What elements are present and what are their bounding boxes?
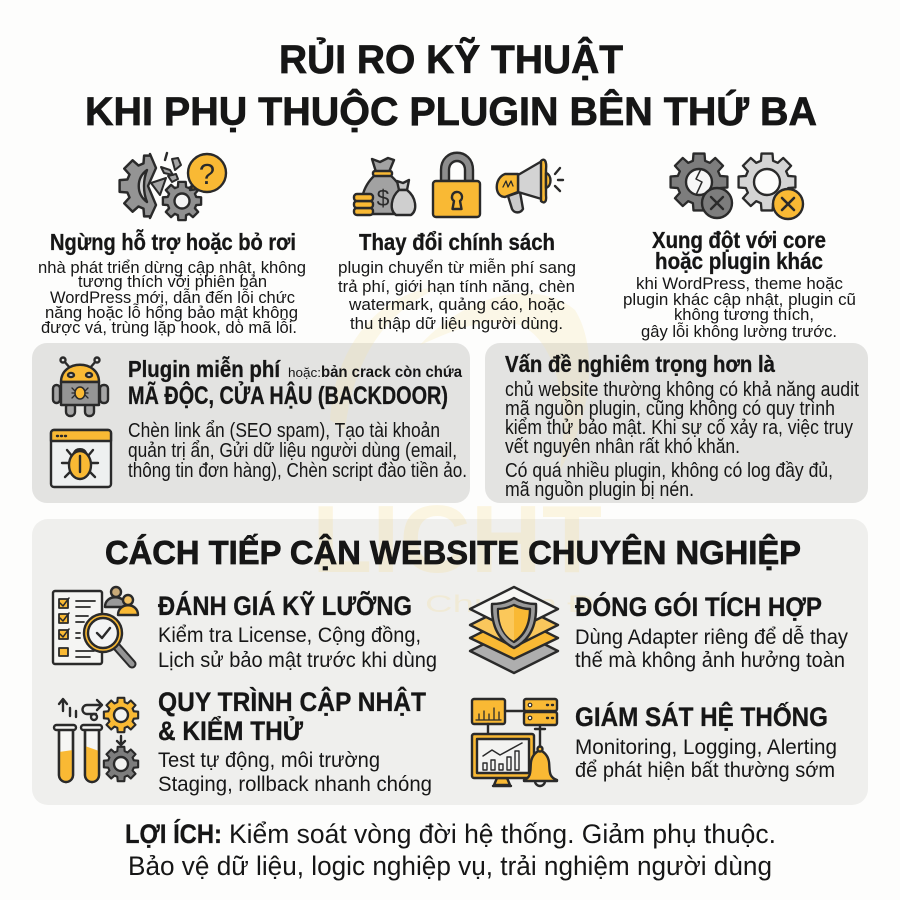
icon: checklist with magnifier	[53, 587, 138, 664]
text: careful evaluation description	[158, 624, 437, 672]
text: serious problem description: kiểm thử bảo mật. Khi sự cố xảy ra, việc truy	[505, 417, 853, 439]
text: stop support description: năng hoặc lỗ hổng bảo mật không	[45, 303, 298, 322]
text: policy change description: plugin chuyển từ miễn phí sang	[338, 258, 576, 277]
text: conflict description	[623, 274, 856, 341]
heading: update and test process: QUY TRÌNH CẬP NHẬT	[158, 686, 426, 717]
text: malware behaviours: thông tin đơn hàng), Chèn script đào tiền ảo.	[128, 460, 467, 482]
icon: browser with bug	[51, 430, 111, 487]
icon: broken gears with question bubble: ?	[199, 159, 215, 191]
text: careful evaluation description: Kiểm tra License, Cộng đồng,	[158, 624, 421, 647]
text: policy change description	[338, 258, 576, 333]
panel: serious problem	[485, 343, 868, 503]
icon: layered shield	[470, 587, 558, 673]
text: stop support description: được vá, trùng lặp hook, dò mã lỗi.	[41, 318, 297, 337]
icon: robot with bug	[53, 358, 108, 416]
text: update and test description	[158, 749, 432, 796]
text: stop support description: nhà phát triển dừng cập nhật, không	[38, 258, 306, 277]
heading: conflict	[652, 227, 826, 274]
text: policy change description: thu thập dữ liệu người dùng.	[350, 314, 563, 333]
text: stop support description	[38, 258, 306, 337]
icon: test tubes and gears	[54, 698, 138, 782]
text: malware behaviours: quản trị ẩn, Gửi dữ liệu người dùng (email,	[128, 440, 457, 462]
watermark logo	[312, 287, 602, 618]
text: serious problem description: mã nguồn plugin, cũng không có quy trình	[505, 398, 835, 420]
text: encapsulation description: Dùng Adapter riêng để dễ thay	[575, 626, 848, 649]
heading: free plugin warning: bản crack còn chứa	[321, 364, 462, 381]
icon: broken gears with question bubble	[120, 152, 226, 222]
text: serious problem description: mã nguồn plugin bị nén.	[505, 479, 694, 501]
text: update and test description: Test tự động, môi trường	[158, 749, 380, 772]
text: serious problem description: Có quá nhiều plugin, không có log đầy đủ,	[505, 460, 833, 482]
heading: free plugin warning: Plugin miễn phí	[128, 355, 281, 382]
text: conflict description: plugin khác cập nhật, plugin cũ	[623, 290, 856, 309]
text: encapsulation description: thế mà không ảnh hưởng toàn	[575, 649, 845, 672]
text: encapsulation description	[575, 626, 848, 672]
text: policy change description: trả phí, giới hạn tính năng, chèn	[338, 277, 575, 296]
text: conflict description: gây lỗi không lường trước.	[641, 322, 837, 341]
heading: professional approach: CÁCH TIẾP CẬN WEBSITE CHUYÊN NGHIỆP	[105, 534, 801, 571]
text: careful evaluation description: Lịch sử bảo mật trước khi dùng	[158, 649, 437, 672]
text: stop support description: tương thích với phiên bản	[78, 272, 267, 291]
panel: malware	[32, 343, 470, 503]
text: malware behaviours: Chèn link ẩn (SEO spam), Tạo tài khoản	[128, 420, 440, 442]
text: serious problem description: chủ website thường không có khả năng audit	[505, 379, 859, 401]
heading: conflict: Xung đột với core	[652, 227, 826, 253]
heading: free plugin warning	[128, 355, 462, 410]
heading: system monitoring: GIÁM SÁT HỆ THỐNG	[575, 700, 828, 732]
watermark logo: Chuyên Đ	[425, 591, 595, 618]
text: stop support description: WordPress mới, dẫn đến lỗi chức	[50, 288, 295, 307]
text: serious problem description	[505, 379, 859, 501]
footer: benefits: Bảo vệ dữ liệu, logic nghiệp vụ, trải nghiệm người dùng	[128, 851, 772, 881]
title: KHI PHỤ THUỘC PLUGIN BÊN THỨ BA	[85, 88, 817, 134]
heading: careful evaluation: ĐÁNH GIÁ KỸ LƯỠNG	[158, 590, 412, 621]
text: conflict description: không tương thích,	[674, 305, 814, 324]
footer: benefits: Kiểm soát vòng đời hệ thống. Giảm phụ thuộc.	[229, 819, 776, 849]
text: update and test description: Staging, rollback nhanh chóng	[158, 773, 432, 796]
heading: policy change: Thay đổi chính sách	[359, 229, 555, 255]
text: policy change description: watermark, quảng cáo, hoặc	[348, 295, 565, 314]
icon: megaphone	[497, 160, 563, 212]
icon: money bags	[354, 158, 415, 215]
text: serious problem description: vết nguyên nhân rất khó khăn.	[505, 436, 740, 458]
footer: benefits	[125, 818, 776, 881]
icon: money bags: $	[377, 185, 390, 211]
watermark logo: LICHT	[312, 486, 602, 593]
text: system monitoring description: để phát hiện bất thường sớm	[575, 759, 835, 782]
icon: padlock	[433, 153, 480, 217]
heading: update and test process: & KIỂM THỬ	[158, 714, 304, 746]
footer: benefits: LỢI ÍCH:	[125, 818, 222, 849]
heading: update and test process	[158, 686, 426, 746]
title	[85, 36, 817, 134]
heading: free plugin warning: hoặc:	[288, 365, 321, 380]
heading: conflict: hoặc plugin khác	[655, 248, 823, 274]
heading: free plugin warning: MÃ ĐỘC, CỬA HẬU (BACKDOOR)	[128, 380, 448, 410]
heading: stop support: Ngừng hỗ trợ hoặc bỏ rơi	[50, 228, 296, 255]
heading: serious problem: Vấn đề nghiêm trọng hơn là	[505, 351, 775, 377]
text: malware behaviours	[128, 420, 467, 482]
heading: encapsulation: ĐÓNG GÓI TÍCH HỢP	[575, 591, 822, 622]
text: conflict description: khi WordPress, theme hoặc	[636, 274, 843, 293]
text: system monitoring description	[575, 736, 837, 782]
icon: conflicting gears	[671, 154, 803, 219]
icon: monitoring dashboard and alert bell	[472, 699, 557, 786]
title: RỦI RO KỸ THUẬT	[279, 36, 623, 82]
panel: professional approach	[32, 519, 868, 805]
text: system monitoring description: Monitoring, Logging, Alerting	[575, 736, 837, 759]
